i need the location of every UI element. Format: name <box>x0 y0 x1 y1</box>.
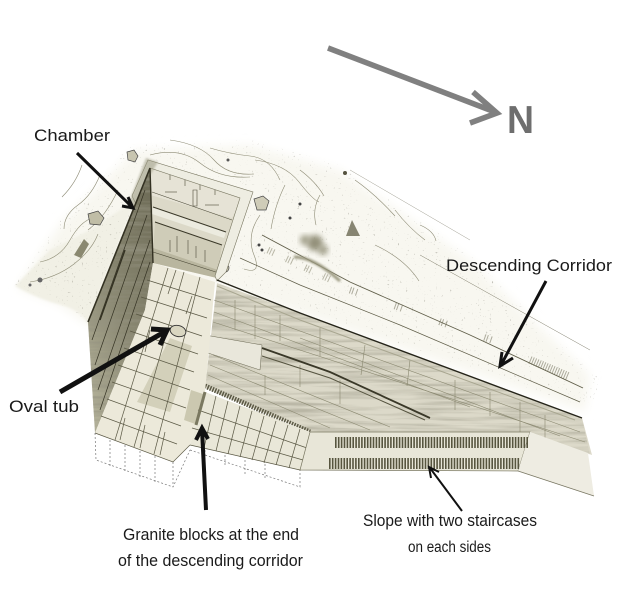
terrain surface <box>15 140 599 408</box>
arrow: granite blocks <box>196 428 208 510</box>
label: granite blocks: Granite blocks at the end <box>123 525 299 544</box>
label: slope with two staircases <box>363 467 537 556</box>
chamber left wall <box>88 168 153 433</box>
oval tub <box>169 324 187 338</box>
label: slope with two staircases: Slope with two staircases <box>363 512 537 530</box>
dashed foundation outline <box>95 433 300 487</box>
long wall of descending corridor <box>205 279 592 455</box>
label: granite blocks: of the descending corridor <box>118 551 303 570</box>
upper staircase <box>335 437 528 448</box>
arrow: slope <box>429 467 462 511</box>
arrow: chamber <box>77 153 133 208</box>
arrow: oval tub <box>60 329 167 392</box>
label: chamber <box>34 126 133 208</box>
north arrow <box>328 48 534 142</box>
lower staircase <box>329 458 520 469</box>
terrain contour lines <box>30 140 436 282</box>
label: granite blocks <box>118 428 303 570</box>
rocks <box>28 150 360 286</box>
corridor end blocks <box>190 392 310 470</box>
chamber <box>85 158 253 435</box>
chamber rim <box>132 160 253 281</box>
arrow: descending corridor <box>500 281 546 366</box>
slope with two staircases <box>300 432 594 496</box>
label: descending corridor: Descending Corridor <box>446 256 612 275</box>
label: oval tub <box>9 329 167 416</box>
floor <box>95 263 215 462</box>
label: oval tub: Oval tub <box>9 397 79 416</box>
floor tile lines <box>95 268 211 462</box>
label: slope with two staircases: on each sides <box>408 539 491 556</box>
terrain ridges <box>240 170 590 402</box>
label: descending corridor <box>446 256 612 366</box>
north label: N <box>507 99 534 142</box>
chamber back walls <box>150 168 243 278</box>
granite slabs <box>137 338 192 412</box>
label: chamber: Chamber <box>34 126 110 145</box>
